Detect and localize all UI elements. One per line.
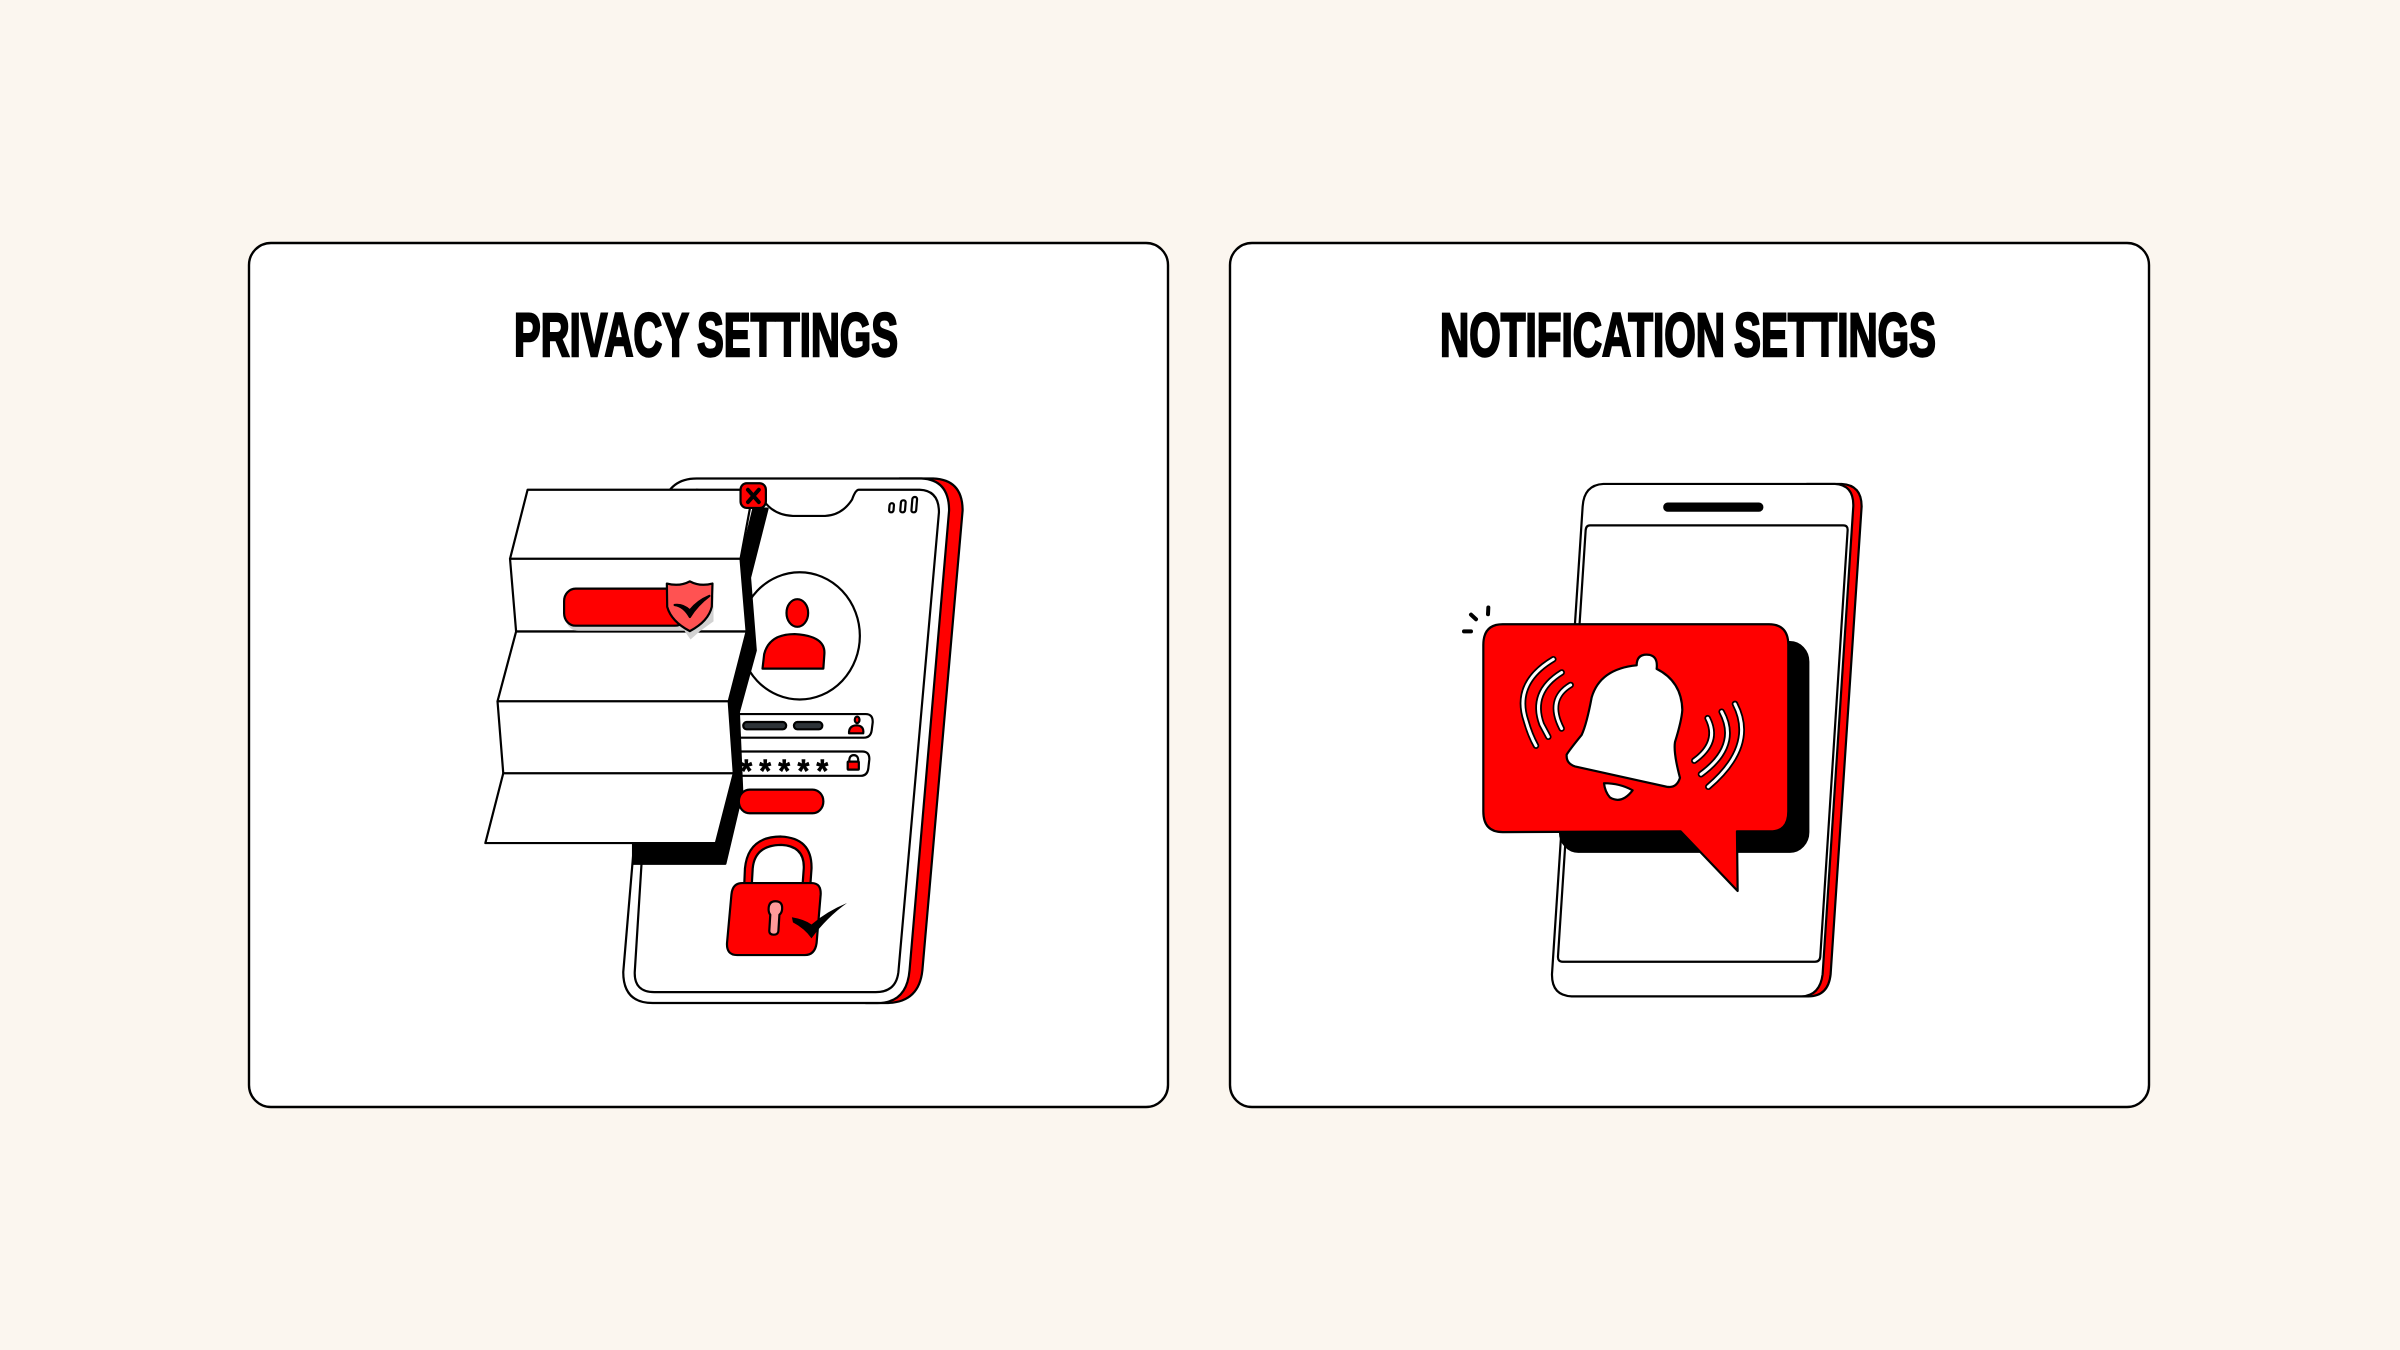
check mark [792, 903, 847, 938]
panel: privacy settings [249, 243, 1168, 1107]
password field [717, 751, 869, 789]
illustration: phone with folded privacy sheet [485, 478, 963, 1003]
heading: notification settings: SETTINGS [1734, 301, 1936, 369]
avatar [740, 572, 860, 699]
padlock [727, 837, 821, 955]
password field: * [778, 752, 791, 789]
heading: privacy settings [514, 301, 898, 369]
password field: * [740, 752, 753, 789]
phone body [1552, 484, 1853, 996]
sound waves [1523, 659, 1742, 787]
phone screen [1558, 525, 1848, 962]
password field: * [797, 752, 810, 789]
shadow under bar [566, 596, 714, 640]
illustration: phone with bell notification [1464, 484, 1862, 996]
heading: privacy settings: SETTINGS [697, 301, 898, 369]
submit button [739, 790, 823, 813]
close button [741, 483, 766, 508]
username field [717, 714, 873, 738]
phone back edge [1773, 484, 1862, 996]
alert sparks [1464, 607, 1488, 631]
panel: notification settings [1230, 243, 2149, 1107]
speaker [1664, 504, 1762, 511]
password field: * [759, 752, 772, 789]
bell [1567, 655, 1682, 800]
fold shadow [633, 509, 768, 864]
speech bubble [1483, 624, 1788, 891]
shield with check [667, 581, 712, 631]
password field: * [816, 752, 829, 789]
phone screen with notch [635, 490, 939, 992]
heading: notification settings: NOTIFICATION [1440, 301, 1725, 369]
folded sheet [485, 490, 753, 843]
red bar [564, 589, 686, 626]
heading: privacy settings: PRIVACY [514, 301, 689, 369]
signal bars [889, 497, 917, 512]
phone body [623, 478, 949, 1003]
phone back edge [866, 478, 963, 1003]
bubble shadow [1560, 642, 1808, 852]
